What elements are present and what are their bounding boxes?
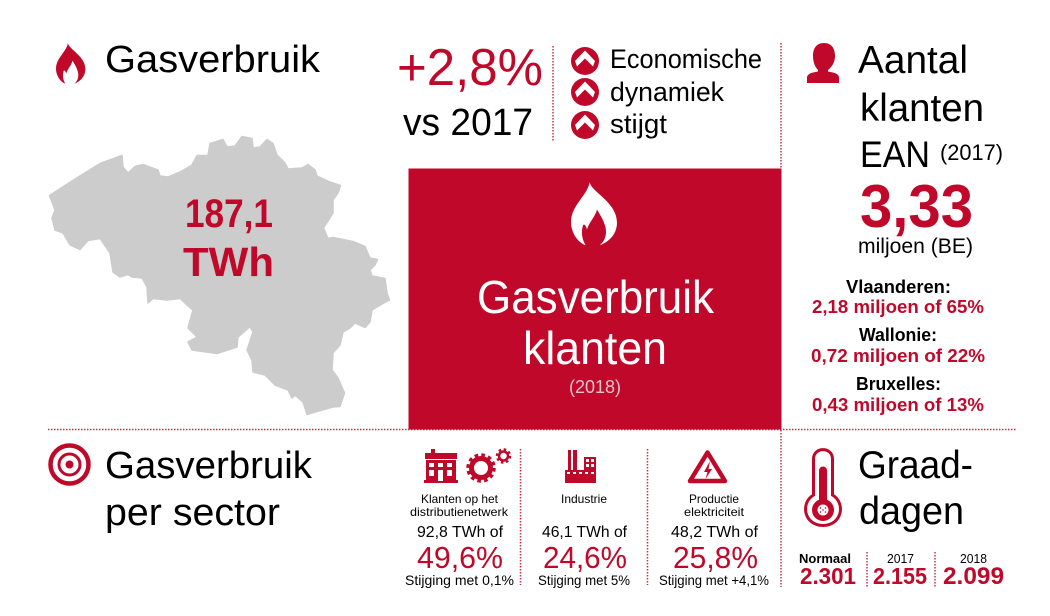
sector label: Industrie	[561, 492, 607, 506]
sector values: 25,8%	[673, 540, 758, 575]
sector label	[684, 492, 745, 519]
sector label: Klanten op het	[421, 492, 499, 506]
sector label	[410, 492, 509, 519]
degree day: 2017: 2.155	[873, 563, 927, 589]
comparison label: vs 2017	[403, 102, 533, 144]
degree day: normal: 2.301	[800, 563, 856, 589]
total value: 187,1	[185, 192, 273, 236]
regional breakdown	[811, 277, 985, 415]
map of Belgium with total	[50, 136, 390, 414]
sector label: elektriciteit	[684, 505, 745, 519]
heading: Gasverbruik per sector: Gasverbruik	[105, 445, 313, 487]
icon: house	[424, 449, 458, 483]
icon: arrow up 1	[571, 47, 599, 75]
sector values: Stijging met 0,1%	[405, 572, 514, 588]
heading: Aantal klanten EAN: EAN	[860, 134, 930, 175]
sector label: Productie	[689, 492, 739, 506]
sector values	[538, 524, 630, 588]
panel: central red box	[408, 168, 782, 430]
heading: Aantal klanten EAN: Aantal	[858, 39, 968, 82]
icon: warning triangle	[690, 452, 725, 481]
text: Economische dynamiek stijgt: stijgt	[610, 109, 667, 139]
sector values	[405, 524, 514, 588]
figure: 3,33 miljoen: 3,33	[860, 173, 973, 240]
regional breakdown: 0,43 miljoen of 13%	[812, 395, 984, 415]
degree day: 2018: 2018	[960, 551, 987, 566]
sector values	[659, 524, 769, 588]
heading: Gasverbruik: Gasverbruik	[105, 39, 321, 81]
box title	[477, 271, 715, 397]
panel: industry	[538, 450, 630, 588]
icon: white flame	[571, 182, 617, 245]
text: Economische dynamiek stijgt: Economische	[610, 44, 762, 74]
regional breakdown: 0,72 miljoen of 22%	[811, 346, 985, 366]
box title: Gasverbruik	[477, 271, 715, 323]
panel: distribution network customers	[405, 449, 514, 588]
degree day: 2018: 2.099	[943, 563, 1004, 590]
icon: flame	[56, 43, 85, 84]
heading: Aantal klanten EAN: (2017)	[940, 140, 1003, 165]
heading: Graad-dagen	[858, 444, 973, 533]
box title: klanten	[523, 322, 667, 374]
heading: Graad-dagen: Graad-	[858, 444, 973, 487]
sector values: 46,1 TWh of	[542, 524, 628, 541]
regional breakdown: Bruxelles:	[856, 374, 941, 394]
panel: electricity production	[659, 452, 769, 588]
text: Economische dynamiek stijgt: dynamiek	[610, 77, 724, 107]
heading: Aantal klanten EAN: klanten	[860, 87, 984, 130]
sector values: 92,8 TWh of	[417, 524, 504, 541]
heading: Gasverbruik per sector: per sector	[105, 492, 280, 534]
degree day: normal: Normaal	[799, 551, 851, 566]
icon: thermometer	[806, 450, 840, 526]
sector label: distributienetwerk	[410, 505, 509, 519]
figure: 3,33 miljoen: miljoen (BE)	[858, 235, 973, 258]
box title: (2018)	[569, 377, 621, 397]
degree day: 2018	[943, 551, 1004, 590]
total value: TWh	[183, 239, 274, 285]
panel: economic dynamics	[571, 44, 762, 139]
degree day: normal	[799, 551, 856, 589]
degree day: 2017	[873, 551, 927, 589]
sector values: 49,6%	[417, 540, 503, 575]
sector values: 48,2 TWh of	[671, 524, 759, 541]
icon: arrow up 3	[571, 111, 599, 139]
sector values: Stijging met 5%	[538, 572, 630, 588]
degree day: 2017: 2017	[887, 551, 914, 566]
heading: Graad-dagen: dagen	[859, 490, 964, 533]
regional breakdown: Wallonie:	[859, 325, 937, 345]
regional breakdown: Vlaanderen:	[846, 277, 951, 297]
panel: growth versus 2017	[397, 39, 543, 144]
icon: gears	[468, 450, 510, 481]
total value	[183, 192, 274, 285]
heading: Aantal klanten EAN	[858, 39, 1003, 175]
icon: person	[807, 43, 839, 83]
text: Economische dynamiek stijgt	[610, 44, 762, 139]
regional breakdown: 2,18 miljoen of 65%	[812, 297, 984, 317]
icon: arrow up 2	[571, 78, 599, 106]
heading: Gasverbruik per sector	[105, 445, 313, 534]
icon: target	[50, 446, 88, 484]
sector values: Stijging met +4,1%	[659, 572, 769, 588]
icon: factory	[565, 450, 596, 483]
growth figure: +2,8%	[397, 39, 543, 97]
map	[50, 136, 390, 414]
sector values: 24,6%	[543, 540, 627, 575]
